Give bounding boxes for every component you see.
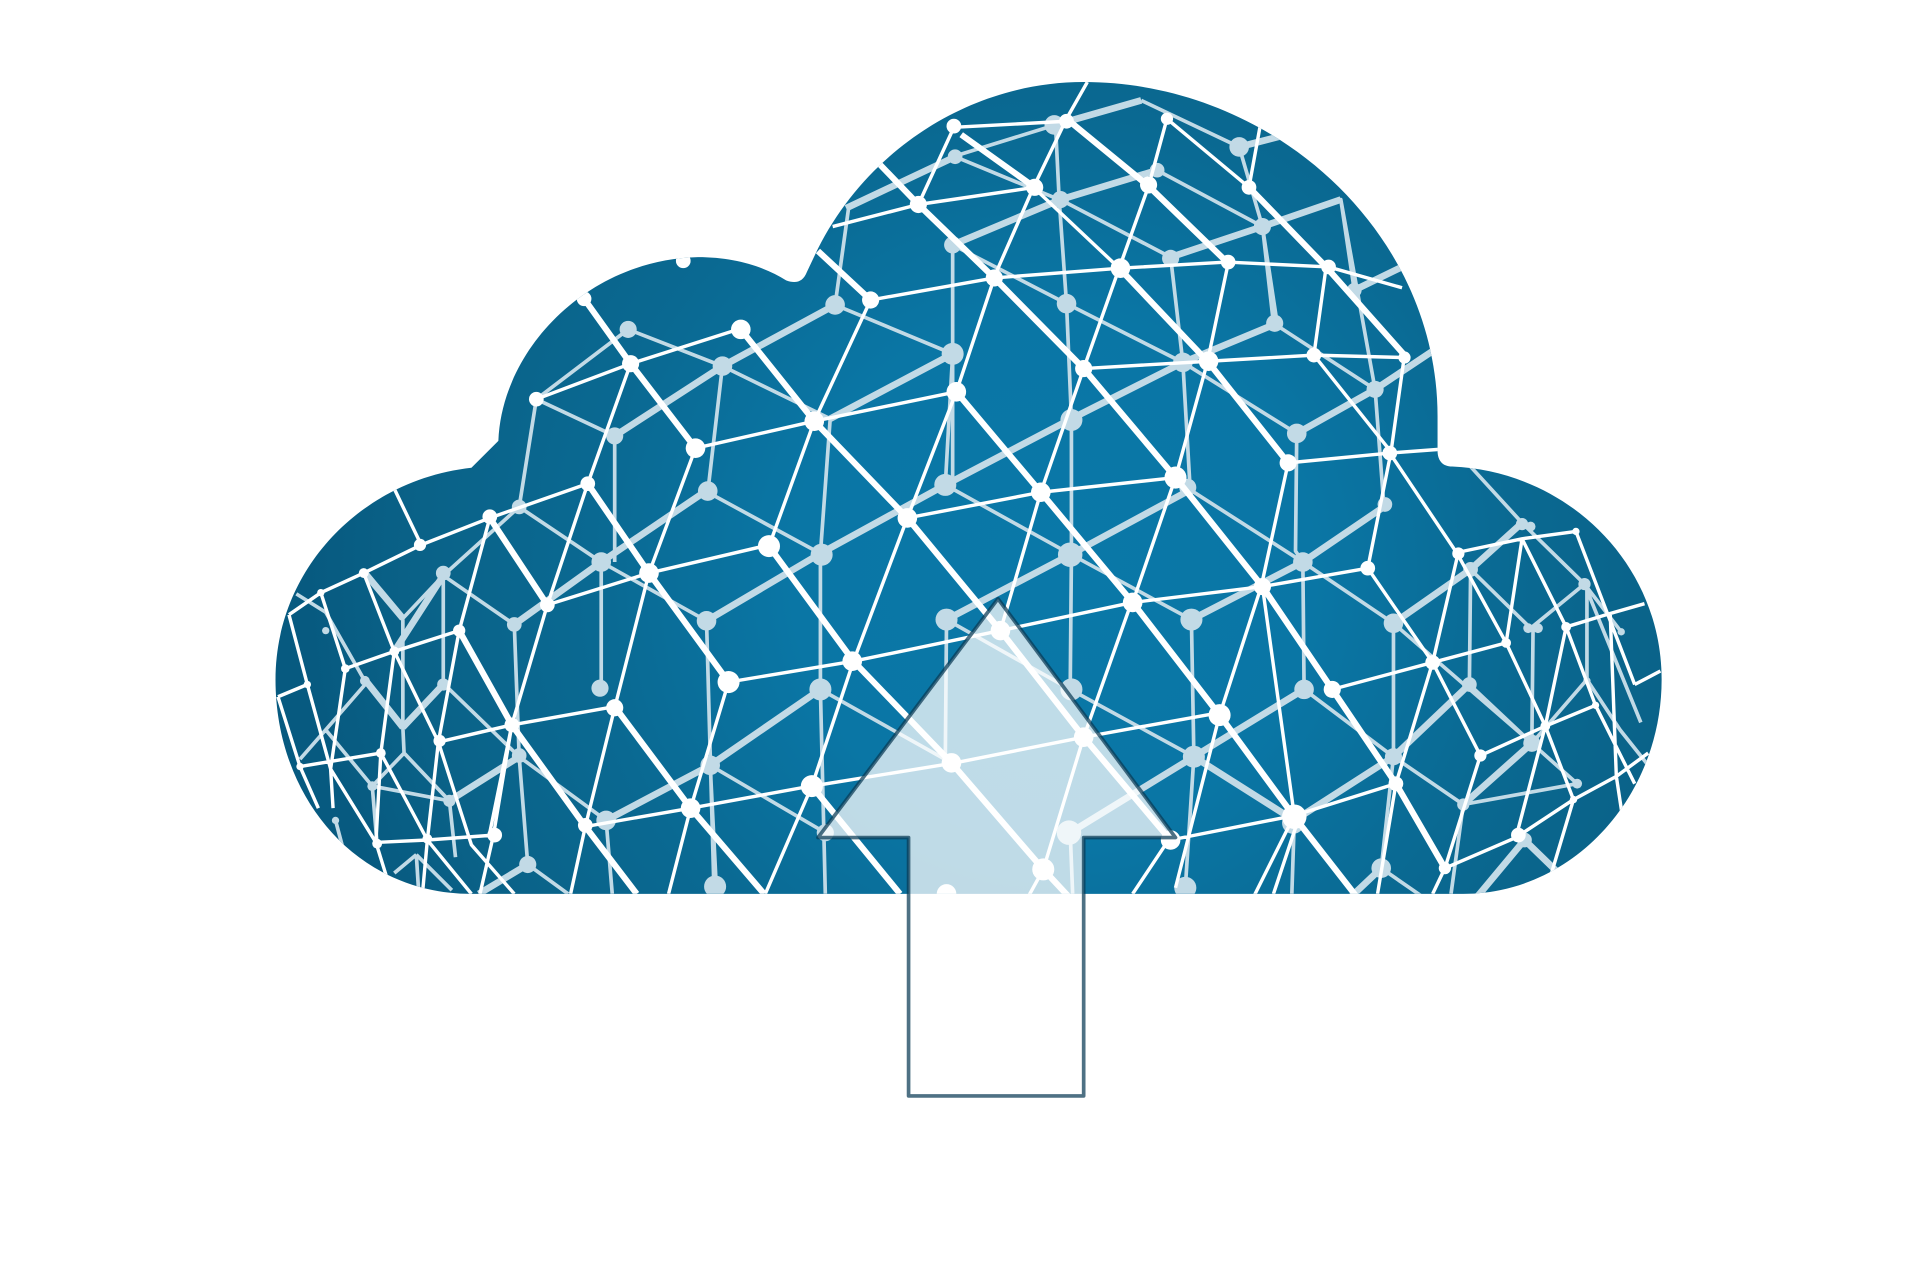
network: light blue mesh [296, 100, 1663, 912]
network: white mesh [278, 82, 1660, 918]
white nodes [296, 113, 1599, 904]
light nodes [322, 115, 1625, 899]
upload arrow [818, 599, 1176, 1096]
cloud body [276, 82, 1662, 894]
illustration: cloud upload network [276, 82, 1662, 1098]
